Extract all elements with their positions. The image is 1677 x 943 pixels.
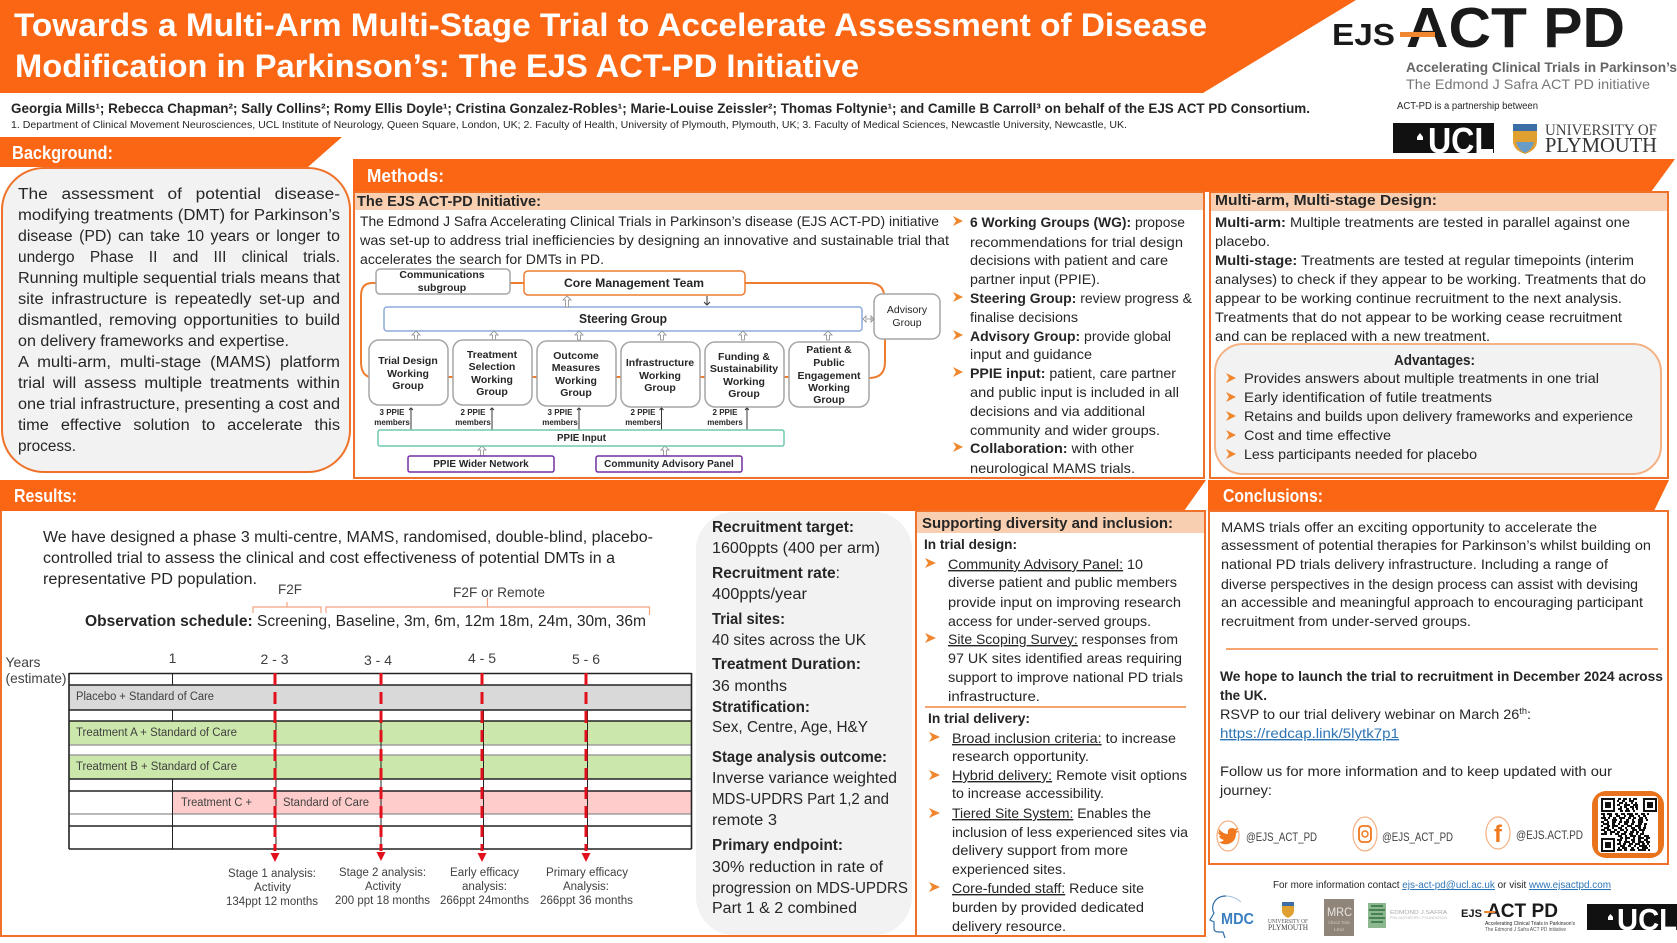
callout: advantages: Provides answers about multiple treatments in one trial (1244, 370, 1599, 386)
banner: methods (353, 159, 1675, 192)
box: communications subgroup: Communications (399, 269, 485, 281)
logo: EJS ACT PD small: ACT PD (1487, 901, 1558, 922)
panel: trial key facts: Treatment Duration: (712, 656, 861, 673)
heading: MAMS design: Multi-arm, Multi-stage Design: (1215, 192, 1437, 209)
labels: PPIE members: members (542, 418, 578, 427)
chart: observation schedule: Observation schedule: Screening, Baseline, 3m, 6m, 12m 18m, 24m, 30m, 36m (85, 613, 646, 630)
labels: PPIE members: members (374, 418, 410, 427)
box: core management team (524, 271, 745, 295)
text: background body: The assessment of potential disease- (18, 186, 340, 203)
labels: analyses: Primary efficacy (546, 867, 628, 879)
banner: results: Results: (14, 486, 77, 506)
box: steering group: Steering Group (579, 312, 667, 326)
panel: trial key facts: 40 sites across the UK (712, 632, 867, 649)
logo: MDC: MDC (1221, 911, 1254, 928)
labels: PPIE members: 3 PPIE (548, 408, 573, 417)
logo: UCL (1393, 120, 1494, 161)
panel: results (1, 511, 916, 936)
box: infrastructure working group: Group (644, 382, 676, 394)
text: in trial design: diverse patient and public members (948, 574, 1177, 590)
labels: PPIE members: 2 PPIE (631, 408, 656, 417)
chart: observation schedule: F2F (278, 581, 302, 597)
list: group roles: recommendations for trial design (970, 234, 1183, 250)
panel: trial key facts: Recruitment rate: (712, 565, 840, 582)
text: MAMS explanation: Treatments that do not appear to be working cease recruitment (1215, 309, 1622, 325)
contact line: For more information contact ejs-act-pd@ucl.ac.uk or visit www.ejsactpd.com (1273, 879, 1611, 891)
text: launch date and webinar: th (1519, 706, 1527, 716)
box: outcome measures working group: Group (560, 387, 592, 399)
callout: advantages: Advantages: (1394, 353, 1475, 369)
panel: trial key facts: Inverse variance weighted (712, 770, 897, 787)
logo: MRC (1324, 899, 1354, 936)
chart: observation schedule (85, 581, 650, 630)
panel: trial key facts: Part 1 & 2 combined (712, 900, 857, 917)
labels: PPIE members: 3 PPIE (380, 408, 405, 417)
chart: trial timeline (6, 650, 692, 908)
labels: analyses: 266ppt 24months (440, 895, 529, 907)
panel: EJS ACT-PD initiative (354, 192, 1204, 478)
labels: PPIE members: members (625, 418, 661, 427)
labels: PPIE members: members (455, 418, 491, 427)
text: in trial design: Site Scoping Survey: responses from (948, 631, 1178, 647)
icon: instagram (1353, 817, 1377, 851)
text: in trial delivery: Hybrid delivery: Remote visit options (952, 767, 1187, 783)
text: in trial delivery: Core-funded staff: Reduce site (952, 880, 1144, 896)
logo: UCL footer (1587, 902, 1677, 937)
box: trial design working group: Trial Design (378, 355, 438, 367)
text: initiative intro (359, 213, 949, 267)
logo: University of Plymouth: PLYMOUTH (1545, 133, 1657, 157)
affiliations: 1. Department of Clinical Movement Neurosciences, UCL Institute of Neurology, Queen Square, London, UK; 2. Faculty of Health, University of Plymouth, Plymouth, UK; 3. Faculty of Medical Sciences, Newcastle University, Newcastle, UK. (11, 119, 1127, 131)
list: group roles: finalise decisions (970, 309, 1078, 325)
text: in trial delivery: In trial delivery: (928, 710, 1030, 726)
labels: analyses: analysis: (462, 881, 507, 893)
text: MAMS explanation: placebo. (1215, 233, 1270, 249)
labels: years axis: 2 - 3 (260, 651, 289, 667)
text: in trial delivery: delivery support from more (952, 842, 1128, 858)
list: group roles (953, 214, 1193, 476)
text: conclusions body: MAMS trials offer an exciting opportunity to accelerate the (1221, 519, 1597, 535)
panel: trial key facts (696, 512, 912, 935)
logo: University of Plymouth small (1268, 902, 1308, 932)
box: patient and public engagement working group: Public (813, 357, 845, 369)
icon: facebook (1486, 817, 1510, 849)
labels: analyses: Activity (365, 881, 401, 893)
handle: facebook: @EJS.ACT.PD (1516, 828, 1583, 842)
icon: twitter (1217, 821, 1239, 851)
panel: trial key facts: 1600ppts (400 per arm) (712, 540, 880, 557)
labels: analyses: 134ppt 12 months (226, 896, 318, 908)
panel: trial key facts: remote 3 (712, 812, 777, 829)
box: funding and sustainability working group (705, 342, 784, 407)
text: in trial delivery: to increase accessibility. (952, 785, 1104, 801)
text: background body: disease (PD) can take 10 years or longer to (18, 228, 340, 245)
panel: trial key facts: Trial sites: (712, 611, 785, 628)
title: Modification in Parkinson’s: The EJS ACT-PD Initiative (15, 48, 859, 84)
panel: trial key facts: Sex, Centre, Age, H&Y (712, 719, 868, 736)
text: results intro (43, 529, 653, 588)
text: conclusions body: national PD trials delivery infrastructure. Including a range of (1221, 556, 1608, 572)
QR code (1592, 791, 1664, 858)
list: group roles: community and wider groups. (970, 422, 1160, 438)
labels: years axis (6, 650, 600, 686)
list: group roles: and public input is included in all (970, 384, 1179, 400)
labels: analyses: 200 ppt 18 months (335, 895, 430, 907)
text: conclusions body (1221, 519, 1651, 629)
text: in trial design (924, 536, 1183, 704)
labels: years axis: Years (6, 654, 40, 670)
labels: analyses: Stage 1 analysis: (228, 868, 316, 880)
box: community advisory panel (596, 456, 742, 472)
panel: trial key facts: MDS-UPDRS Part 1,2 and (712, 791, 889, 808)
labels: trial arms: Treatment A + Standard of Care (76, 727, 237, 739)
box: communications subgroup (376, 269, 510, 294)
logo: EJS ACT PD small: The Edmond J Safra ACT PD initiative (1485, 927, 1566, 933)
text: launch date and webinar: journey: (1219, 782, 1272, 798)
text: in trial delivery (928, 710, 1188, 934)
callout: advantages: Less participants needed for placebo (1244, 446, 1477, 462)
text: launch date and webinar: We hope to launch the trial to recruitment in December 2024 across (1220, 668, 1663, 684)
box: core management team: Core Management Team (564, 276, 704, 290)
panel: trial key facts: 400ppts/year (712, 586, 807, 603)
text: background body (18, 186, 341, 455)
list: group roles: input and guidance (970, 346, 1092, 362)
text: background body: undergo Phase II and III clinical trials. (18, 249, 340, 266)
list: group roles: partner input (PPIE). (970, 271, 1100, 287)
text: in trial delivery: research opportunity. (952, 748, 1089, 764)
list: group roles: decisions with patient and care (970, 252, 1168, 268)
text: launch date and webinar: the UK. (1220, 687, 1267, 703)
panel: conclusions (1209, 511, 1668, 864)
text: background body: site infrastructure is repeatedly set-up and (18, 291, 340, 308)
text: in trial design: provide input on improving research (948, 594, 1181, 610)
box: outcome measures working group: Working (555, 375, 597, 387)
box: trial design working group: Group (392, 380, 424, 392)
labels: PPIE members: 2 PPIE (713, 408, 738, 417)
text: in trial delivery: delivery resource. (952, 918, 1066, 934)
header banner (0, 0, 1356, 93)
text: in trial design: 97 UK sites identified areas requiring (948, 650, 1182, 666)
labels: trial arms: Standard of Care (283, 797, 369, 809)
text: background body: on delivery frameworks and expertise. (18, 333, 289, 350)
text: MAMS explanation: and can be replaced with a new treatment. (1215, 328, 1490, 344)
text: MAMS explanation: appear to be working continue recruitment to the next analysis. (1215, 290, 1622, 306)
chart: observation schedule: F2F or Remote (453, 584, 545, 600)
panel: supporting diversity and inclusion (916, 511, 1205, 936)
labels: years axis: 3 - 4 (364, 652, 392, 668)
box: patient and public engagement working group (789, 342, 869, 407)
box: outcome measures working group: Measures (552, 362, 600, 374)
text: conclusions body: an accessible and meaningful approach to encouraging participant (1221, 594, 1643, 610)
text: conclusions body: recruitment from under-served groups. (1221, 613, 1471, 629)
labels: analyses (226, 867, 633, 908)
box: treatment selection working group: Treatment (467, 349, 518, 361)
labels: years axis: 1 (169, 650, 177, 666)
logo: University of Plymouth (1513, 122, 1657, 157)
box: funding and sustainability working group: Sustainability (710, 363, 778, 375)
box: trial design working group (369, 340, 448, 405)
labels: PPIE members: members (707, 418, 743, 427)
text: in trial design: In trial design: (924, 536, 1017, 552)
labels: years axis: (estimate) (6, 670, 66, 686)
box: funding and sustainability working group: Funding & (718, 351, 770, 363)
logo: EJS ACT PD small (1461, 901, 1575, 933)
box: outcome measures working group: Outcome (553, 350, 599, 362)
list: group roles: 6 Working Groups (WG): propose (970, 214, 1185, 230)
text: in trial delivery: Tiered Site System: Enables the (952, 805, 1151, 821)
logo: EJS ACT PD (1332, 0, 1677, 92)
box: treatment selection working group: Selection (469, 361, 515, 373)
text: launch date and webinar: Follow us for more information and to keep updated with our (1220, 763, 1612, 779)
text: MAMS explanation (1215, 214, 1646, 344)
panel: trial key facts: Stage analysis outcome: (712, 749, 887, 766)
title: Towards a Multi-Arm Multi-Stage Trial to Accelerate Assessment of Disease (14, 7, 1207, 43)
labels: trial arms: Treatment B + Standard of Care (76, 761, 237, 773)
box: advisory group: Group (892, 317, 922, 329)
panel: trial key facts: progression on MDS-UPDRS (712, 880, 908, 897)
text: in trial delivery: experienced sites. (952, 861, 1066, 877)
list: group roles: Advisory Group: provide global (970, 328, 1171, 344)
box: patient and public engagement working group: Patient & (806, 344, 852, 356)
text: in trial design: infrastructure. (948, 688, 1040, 704)
callout: advantages (1215, 344, 1661, 474)
text: background body: modifying treatments (DMT) for Parkinson’s (18, 207, 340, 224)
text: results intro: We have designed a phase 3 multi-centre, MAMS, randomised, double-blind, placebo- (43, 529, 653, 546)
partnership note: ACT-PD is a partnership between (1397, 101, 1538, 112)
panel: trial key facts: Stratification: (712, 699, 810, 716)
logo: UCL: UCL (1428, 120, 1494, 161)
labels: analyses: Early efficacy (450, 867, 519, 879)
logo: University of Plymouth small: UNIVERSITY OF (1268, 918, 1308, 925)
banner: methods: Methods: (367, 166, 444, 186)
labels: trial arms (76, 691, 369, 809)
chart: organisation flow diagram (361, 269, 940, 472)
box: treatment selection working group (453, 340, 532, 405)
panel: background (0, 137, 350, 472)
labels: analyses: Activity (254, 882, 291, 894)
text: launch date and webinar (1219, 668, 1663, 798)
box: infrastructure working group: Working (639, 370, 681, 382)
banner: conclusions: Conclusions: (1223, 486, 1323, 506)
text: launch date and webinar: https://redcap.link/5lytk7p1 (1220, 725, 1399, 741)
logo: MRC: MRC (1327, 905, 1352, 919)
labels: analyses: 266ppt 36 months (540, 895, 633, 907)
text: in trial delivery: burden by provided dedicated (952, 899, 1144, 915)
box: infrastructure working group: Infrastructure (626, 357, 694, 369)
arrows: PPIE to working groups (409, 408, 749, 430)
text: MAMS explanation: Multi-stage: Treatments are tested at regular timepoints (interim (1215, 252, 1634, 268)
logo: MRC: Unit (1334, 927, 1345, 932)
list: group roles: Collaboration: with other (970, 440, 1134, 456)
labels: trial arms: Treatment C + (181, 797, 252, 809)
logo: EJS ACT PD small: Accelerating Clinical Trials in Parkinson’s (1485, 921, 1575, 927)
text: in trial delivery: Broad inclusion criteria: to increase (952, 730, 1176, 746)
box: treatment selection working group: Working (471, 374, 513, 386)
title (14, 7, 1207, 84)
box: community advisory panel: Community Advisory Panel (604, 459, 734, 470)
box: funding and sustainability working group: Working (723, 376, 765, 388)
box: funding and sustainability working group: Group (728, 388, 760, 400)
text: initiative intro: The Edmond J Safra Accelerating Clinical Trials in Parkinson’s disease (EJS ACT-PD) initiative (360, 213, 939, 229)
logo: MDC (1210, 896, 1254, 938)
box: patient and public engagement working group: Group (813, 394, 845, 406)
text: background body: process. (18, 438, 76, 455)
list: group roles: decisions and via additional (970, 403, 1145, 419)
logo: Edmond J Safra foundation (1368, 903, 1448, 928)
labels: PPIE members: 2 PPIE (461, 408, 486, 417)
icons: flow arrows (412, 296, 874, 456)
logo: EJS ACT PD small: EJS (1461, 908, 1482, 920)
text: results intro: controlled trial to assess the clinical and cost effectiveness of potential DMTs in a (43, 550, 615, 567)
text: in trial design: support to improve national PD trials (948, 669, 1183, 685)
text: in trial design: Community Advisory Panel: 10 (948, 556, 1143, 572)
panel: trial key facts: Primary endpoint: (712, 837, 843, 854)
box: trial design working group: Working (387, 368, 429, 380)
text: launch date and webinar: RSVP to our trial delivery webinar on March 26 (1220, 706, 1511, 722)
labels: years axis: 5 - 6 (572, 651, 600, 667)
labels: analyses: Stage 2 analysis: (339, 867, 426, 879)
logo: EJS ACT PD: EJS (1332, 17, 1395, 52)
labels: PPIE members (374, 408, 743, 427)
panel: trial key facts: Recruitment target: (712, 519, 854, 536)
box: infrastructure working group (621, 342, 700, 407)
panel: trial key facts: 30% reduction in rate of (712, 859, 884, 876)
logo: University of Plymouth: UNIVERSITY OF (1545, 122, 1657, 139)
logo: EJS ACT PD: Accelerating Clinical Trials in Parkinson’s (1406, 59, 1677, 75)
banner: results (0, 480, 1206, 511)
text: MAMS explanation: analyses) to check if they appear to be working. Treatments that do (1215, 271, 1646, 287)
panel: multi-arm multi-stage design (1210, 192, 1668, 478)
box: advisory group (874, 294, 940, 339)
box: PPIE input (378, 430, 784, 446)
text: in trial design: access for under-served groups. (948, 613, 1151, 629)
text: background body: dismantled, removing opportunities to build (18, 312, 340, 329)
text: conclusions body: diverse perspectives in the design process can assist with devising (1221, 576, 1638, 592)
heading: initiative: The EJS ACT-PD Initiative: (357, 193, 541, 210)
box: advisory group: Advisory (887, 304, 928, 316)
box: patient and public engagement working group: Engagement (797, 370, 861, 382)
callout: advantages: Cost and time effective (1244, 427, 1391, 443)
box: steering group (384, 307, 862, 331)
text: in trial delivery: inclusion of less experienced sites via (952, 824, 1188, 840)
heading: diversity: Supporting diversity and inclusion: (922, 516, 1173, 532)
icon: facebook: f (1494, 821, 1503, 848)
box: communications subgroup: subgroup (418, 282, 466, 294)
text: initiative intro: accelerates the search for DMTs in PD. (360, 251, 604, 267)
labels: trial arms: Placebo + Standard of Care (76, 691, 214, 703)
text: background body: A multi-arm, multi-stage (MAMS) platform (18, 354, 340, 371)
banner: conclusions (1208, 480, 1669, 511)
handle: instagram: @EJS_ACT_PD (1382, 830, 1453, 844)
box: PPIE wider network (408, 456, 554, 472)
callout: advantages: Retains and builds upon delivery frameworks and experience (1244, 408, 1633, 424)
logo: University of Plymouth small: PLYMOUTH (1268, 923, 1308, 932)
panel: trial key facts: 36 months (712, 678, 787, 695)
text: background body: time effective solution to accelerate this (18, 417, 340, 434)
list: group roles: neurological MAMS trials. (970, 460, 1135, 476)
handle: twitter: @EJS_ACT_PD (1246, 830, 1317, 844)
text: background body: Running multiple sequential trials means that (18, 270, 341, 287)
authors: Georgia Mills¹; Rebecca Chapman²; Sally Collins²; Romy Ellis Doyle¹; Cristina Gonzalez-Robles¹; Marie-Louise Zeissler²; Thomas Foltynie¹; and Camille B Carroll³ on behalf of the EJS ACT PD Consortium. (11, 100, 1310, 116)
box: PPIE input: PPIE Input (557, 432, 606, 444)
box: treatment selection working group: Group (476, 386, 508, 398)
logo: EJS ACT PD: The Edmond J Safra ACT PD initiative (1406, 76, 1650, 92)
list: group roles: PPIE input: patient, care partner (970, 365, 1176, 381)
text: conclusions body: assessment of potential therapies for Parkinson’s whilst building on (1221, 537, 1651, 553)
text: results intro: representative PD population. (43, 571, 257, 588)
box: PPIE wider network: PPIE Wider Network (433, 459, 529, 470)
box: outcome measures working group (537, 341, 616, 406)
box: patient and public engagement working group: Working (808, 382, 850, 394)
text: initiative intro: was set-up to address trial inefficiencies by designing an innovative and sustainable trial that (359, 232, 949, 248)
heading: background: Background: (12, 143, 113, 163)
text: background body: one trial infrastructure, presenting a cost and (18, 396, 340, 413)
row fills (69, 685, 691, 710)
analysis timepoint markers (270, 673, 590, 862)
list: group roles: Steering Group: review progress & (970, 290, 1193, 306)
logo: Edmond J Safra foundation: PHILANTHROPIC FOUNDATION (1390, 916, 1448, 920)
logo: MRC: Clinical Trials (1328, 920, 1351, 925)
text: MAMS explanation: Multi-arm: Multiple treatments are tested in parallel against one (1215, 214, 1630, 230)
labels: analyses: Analysis: (563, 881, 609, 893)
text: background body: trial will assess multiple treatments within (18, 375, 340, 392)
labels: years axis: 4 - 5 (468, 650, 496, 666)
text: launch date and webinar: : (1527, 706, 1531, 722)
logo: Edmond J Safra foundation: EDMOND J.SAFRA (1390, 910, 1447, 916)
callout: advantages: Early identification of futile treatments (1244, 389, 1492, 405)
